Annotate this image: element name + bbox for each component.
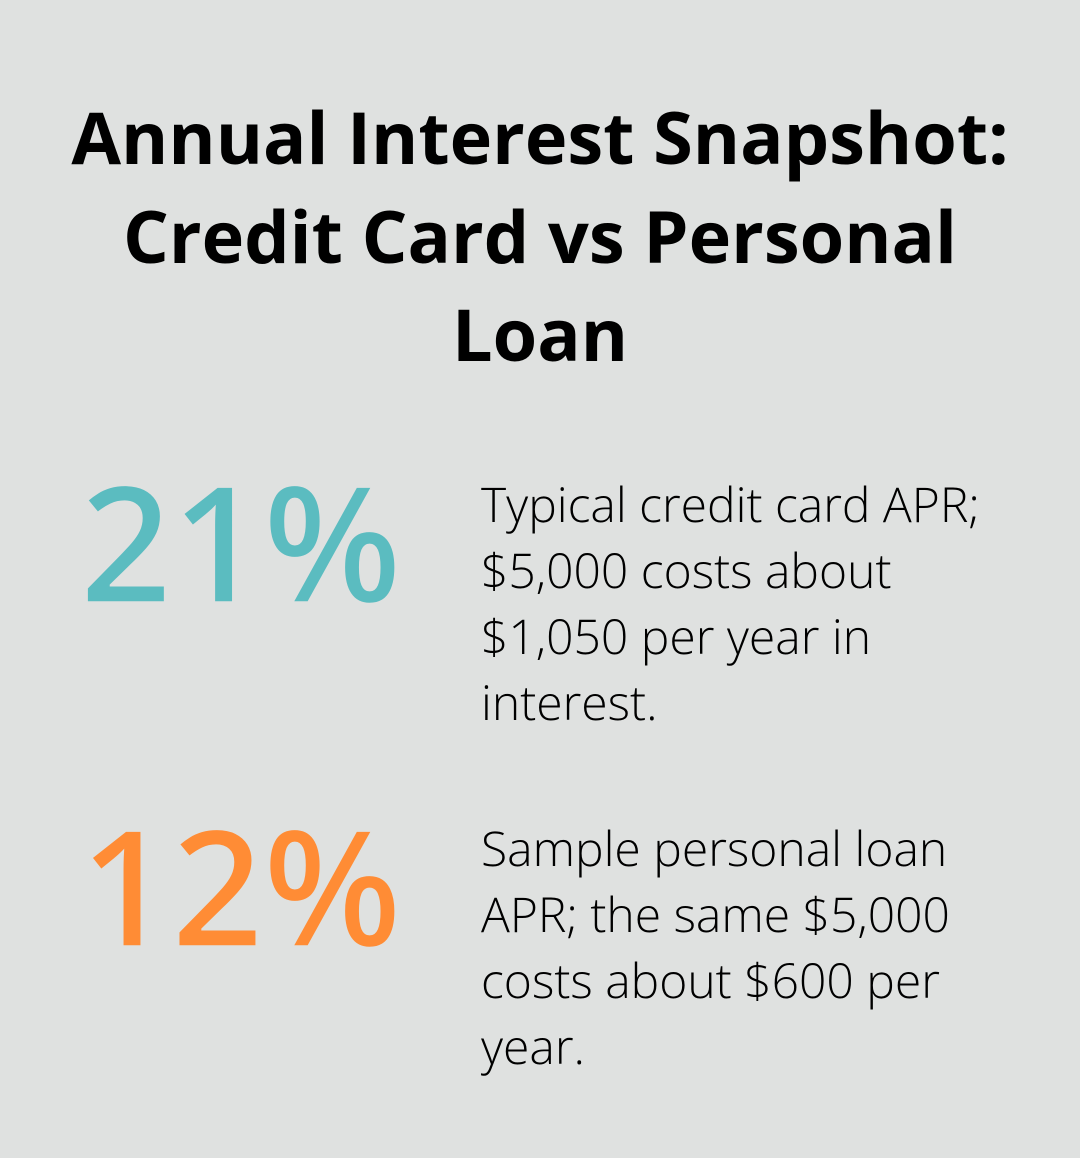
text block: personal loan description [481,816,950,1079]
title: Annual Interest Snapshot: [71,88,1009,186]
text block: personal loan description: Sample personal loan [481,816,947,881]
text block: personal loan description: costs about $600 per [481,948,940,1013]
title: Loan [452,285,628,383]
text block: credit card description: Typical credit card APR; [481,472,980,537]
text block: credit card description: $5,000 costs about [481,538,892,603]
stat: 21%: 21% [80,431,402,650]
stat: 12%: 12% [80,775,402,994]
panel: personal loan stat [80,775,950,1079]
title: Credit Card vs Personal [123,187,957,285]
text block: personal loan description: year. [481,1014,585,1079]
text block: credit card description [481,472,980,735]
text block: credit card description: interest. [481,670,658,735]
panel: credit card stat [80,431,980,735]
text block: credit card description: $1,050 per year in [481,604,871,669]
text block: personal loan description: APR; the same $5,000 [481,882,950,947]
title [71,88,1009,383]
